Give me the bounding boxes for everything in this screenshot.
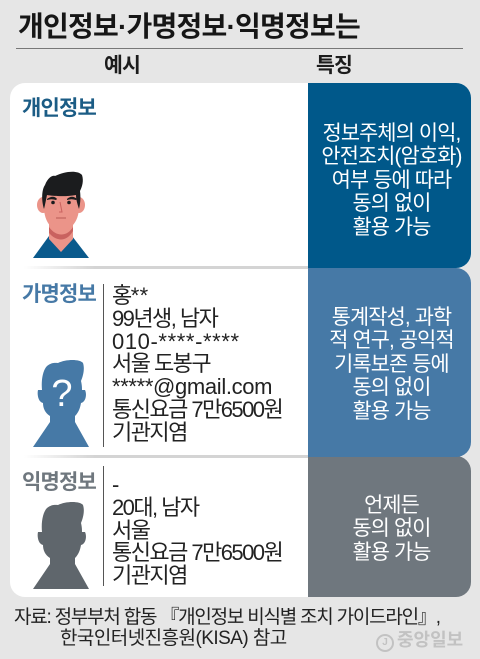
text: pseudonymous feature: 활용 가능 [352,400,431,423]
source note: 자료: 정부부처 합동 『개인정보 비식별 조치 가이드라인』, [14,607,440,628]
source note: 한국인터넷진흥원(KISA) 참고 [60,628,287,649]
text: anonymous example: 통신요금 7만6500원 [112,540,282,565]
panel: personal feature [308,83,471,268]
label: pseudonymous information: 가명정보 [22,283,96,306]
text: personal feature: 정보주체의 이익, [323,122,460,145]
text: anonymous feature [352,494,431,564]
text: anonymous example [112,472,282,588]
text: personal feature: 여부 등에 따라 [332,169,451,192]
column heading: features: 특징 [316,54,352,77]
divider shadow 2 [24,455,308,458]
panel: anonymous feature [308,456,471,597]
text: anonymous feature: 언제든 [364,494,419,517]
title rule [16,48,463,49]
text: personal feature: 안전조치(암호화) [321,145,462,168]
text: personal feature [321,122,462,239]
icon: silhouette with question mark: ? [51,373,73,415]
text: anonymous feature: 동의 없이 [352,517,431,540]
text: pseudonymous feature: 동의 없이 [352,376,431,399]
source note [14,606,440,649]
logo: JoongAng Ilbo: 중앙일보 [397,630,463,650]
text: pseudonymous example: 기관지염 [112,420,187,445]
text: anonymous example: 서울 [112,518,149,543]
text: personal feature: 동의 없이 [352,192,431,215]
text: pseudonymous example: 99년생, 남자 [112,306,217,331]
icon: silhouette [33,502,89,589]
text: pseudonymous feature: 통계작성, 과학 [332,306,451,329]
text: anonymous example: 20대, 남자 [112,495,199,520]
panel: examples background [10,83,320,597]
label: anonymous information: 익명정보 [22,471,96,494]
text: anonymous example: - [112,472,118,497]
label: personal information: 개인정보 [22,97,96,120]
text: pseudonymous example: *****@gmail.com [112,374,272,399]
text: pseudonymous example: 010-****-**** [112,329,240,354]
text: pseudonymous feature: 기록보존 등에 [334,353,449,376]
text: pseudonymous feature: 적 연구, 공익적 [329,329,454,352]
text: pseudonymous example: 통신요금 7만6500원 [112,397,282,422]
text: personal feature: 활용 가능 [352,216,431,239]
text: anonymous feature: 활용 가능 [352,541,431,564]
text: pseudonymous feature [329,306,454,423]
logo: JoongAng Ilbo: J [382,637,388,648]
divider: pseudonymous [103,284,104,447]
column heading: examples: 예시 [104,54,140,77]
panel: pseudonymous feature [308,268,471,457]
text: pseudonymous example: 홍** [112,283,149,308]
icon: silhouette with question mark [33,360,89,447]
icon: man portrait [33,172,89,258]
divider: anonymous [103,466,104,586]
logo: JoongAng Ilbo [376,630,463,652]
text: pseudonymous example [112,283,282,445]
title: 개인정보·가명정보·익명정보는 [18,11,360,42]
text: anonymous example: 기관지염 [112,563,187,588]
text: pseudonymous example: 서울 도봉구 [112,351,210,376]
divider shadow 1 [24,266,308,269]
